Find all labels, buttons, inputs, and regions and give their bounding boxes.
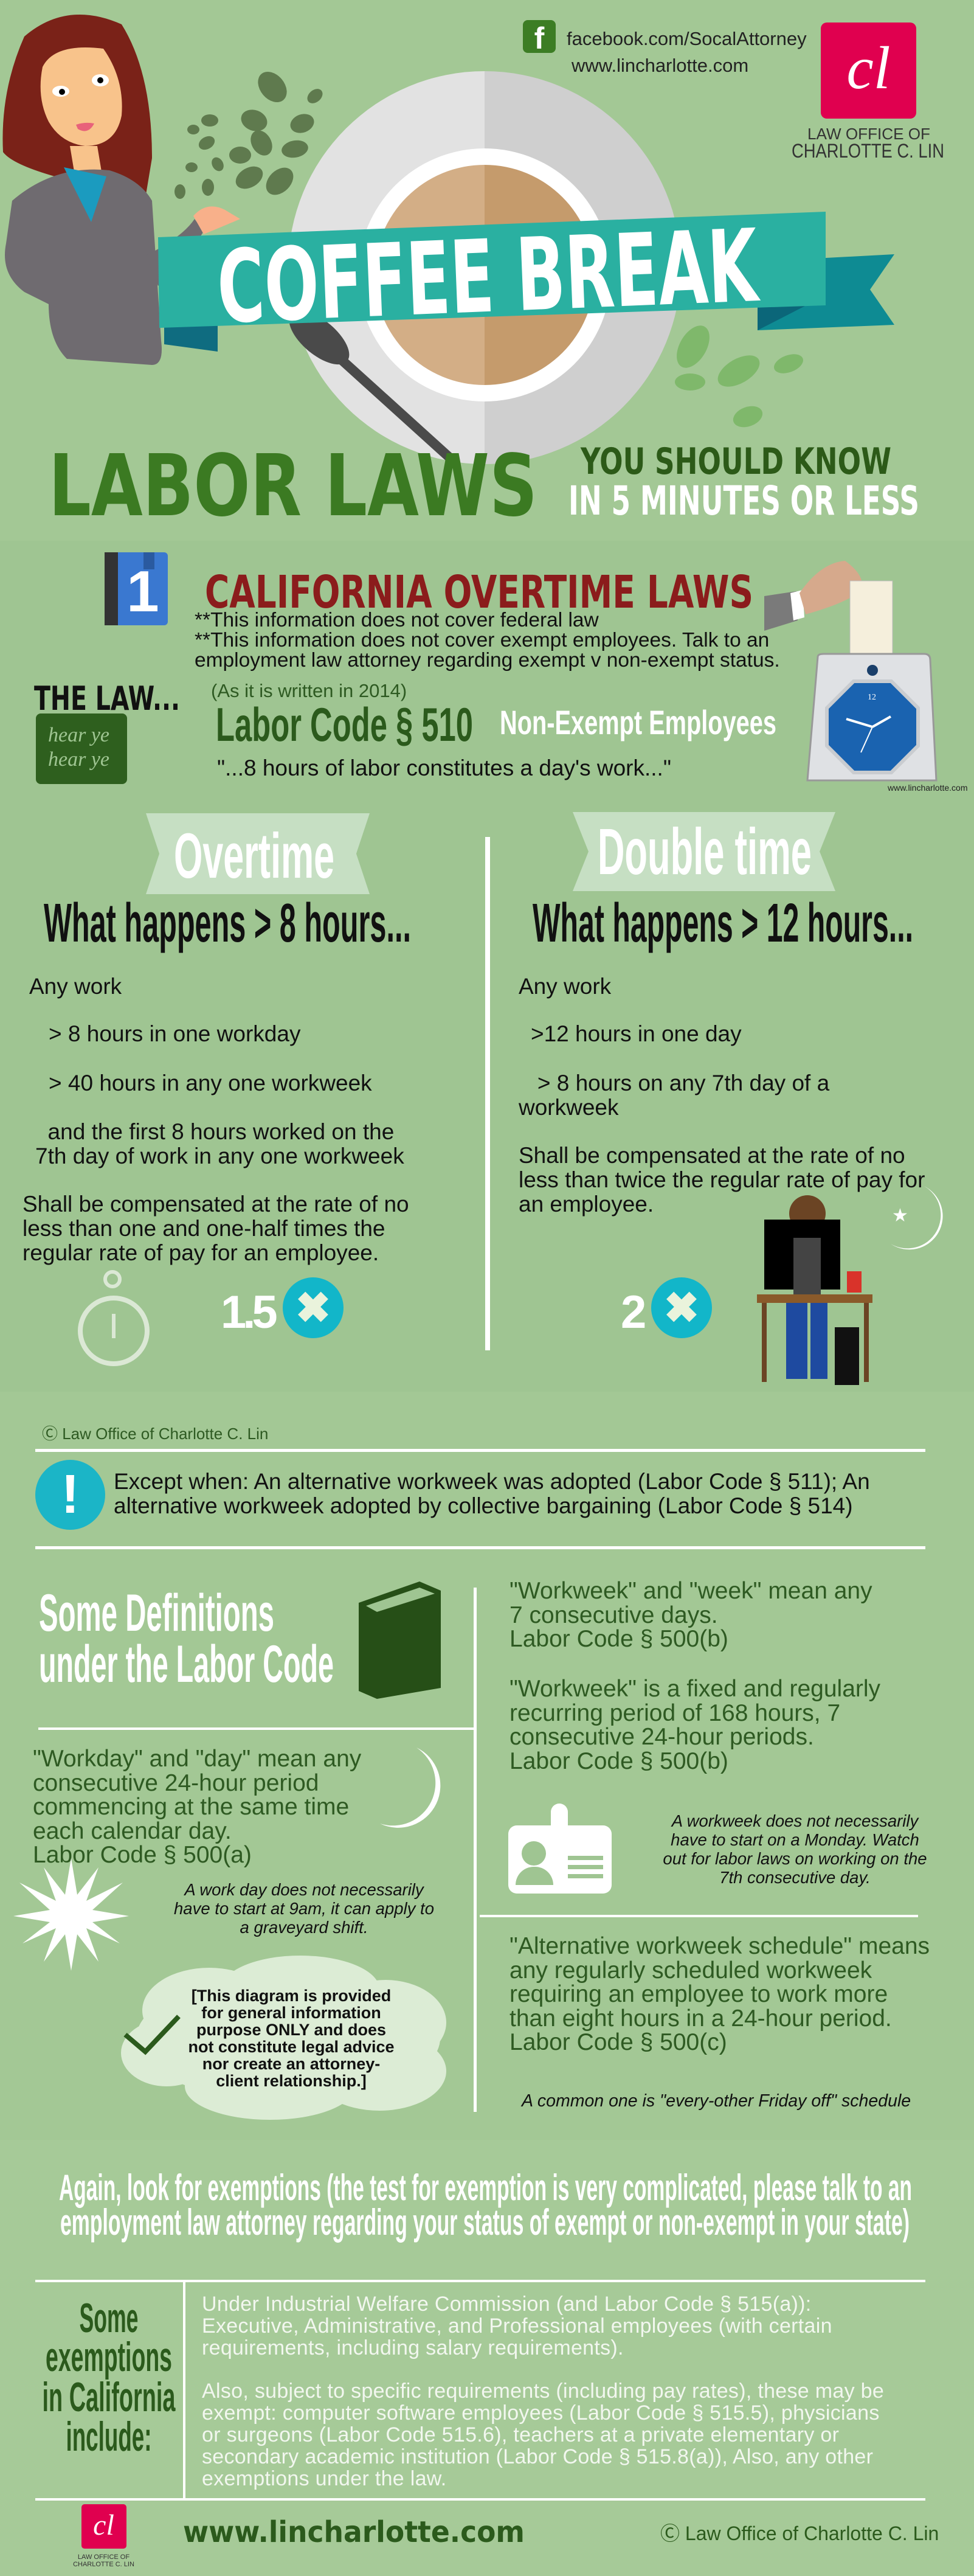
note: workweek: A workweek does not necessarily (672, 1811, 918, 1830)
note: workweek: 7th consecutive day. (719, 1868, 871, 1887)
copyright line: Ⓒ Law Office of Charlotte C. Lin (42, 1425, 268, 1443)
callout: disclaimer cloud (121, 1956, 446, 2120)
exemptions label: include: (66, 2414, 152, 2460)
logo: law office (792, 23, 944, 159)
callout: disclaimer cloud: for general information (201, 2004, 381, 2022)
text: A common one is "every-other Friday off" schedule (522, 2091, 911, 2111)
exemptions text: secondary academic institution (Labor Code § 515.8(a)), Also, any other (202, 2445, 873, 2468)
icon: hear ye scroll: hear ye (48, 748, 109, 771)
definition: workday: commencing at the same time (33, 1794, 349, 1820)
panel: double time: workweek (519, 1095, 619, 1120)
icon: time clock with hand: 12 (868, 693, 876, 702)
callout: disclaimer cloud: client relationship.] (216, 2072, 367, 2090)
double time ribbon (573, 812, 835, 891)
panel: overtime: > 8 hours in one workday (49, 1021, 300, 1046)
spoon (280, 301, 455, 462)
icon: id badge (508, 1804, 612, 1894)
heading: some definitions: under the Labor Code (39, 1635, 334, 1693)
icon: exclamation: ! (61, 1464, 79, 1525)
disclaimer text (195, 609, 780, 672)
note: workday (174, 1880, 434, 1937)
footer logo: CHARLOTTE C. LIN (73, 2561, 134, 2568)
icon: stopwatch (78, 1270, 150, 1366)
definition: alternative workweek: any regularly scheduled workweek (509, 1957, 872, 1983)
exemptions text: Under Industrial Welfare Commission (and Labor Code § 515(a)): (202, 2293, 812, 2316)
exemptions text (202, 2293, 884, 2490)
panel: overtime: and the first 8 hours worked on the (48, 1119, 394, 1144)
heading: what happens 8: What happens > 8 hours... (44, 893, 411, 954)
icon: time clock with hand (764, 561, 938, 781)
1.5x badge: ✖ (295, 1284, 331, 1331)
2x badge: ✖ (664, 1284, 699, 1331)
panel: double time (519, 812, 943, 1385)
cup (358, 148, 611, 401)
icon: sun starburst (13, 1858, 129, 1971)
icon: hear ye scroll: hear ye (48, 724, 109, 746)
saucer (288, 71, 681, 464)
note: workweek: have to start on a Monday. Watch (671, 1830, 919, 1849)
heading: overtime: Overtime (174, 821, 334, 892)
heading: california overtime laws: CALIFORNIA OVERTIME LAWS (205, 566, 753, 619)
exemptions label: exemptions (46, 2334, 172, 2380)
note: workday: a graveyard shift. (240, 1918, 368, 1937)
definition: workday (33, 1746, 361, 1868)
icon: facebook: f (534, 21, 544, 55)
panel: overtime: regular rate of pay for an employee. (22, 1240, 379, 1265)
icon: exclamation (35, 1460, 105, 1530)
title: LABOR LAWS: LABOR LAWS (49, 437, 537, 536)
social links: facebook.com/SocalAttorney (567, 28, 807, 49)
panel: double time: Any work (519, 974, 611, 999)
definition: alternative workweek: "Alternative workweek schedule" means (509, 1933, 930, 1959)
icon: moon (381, 1748, 440, 1828)
credit small: www.lincharlotte.com (888, 783, 968, 793)
note: workday: A work day does not necessarily (184, 1880, 424, 1899)
callout: except when: alternative workweek adopted by collective bargaining (Labor Code § 514) (114, 1493, 853, 1518)
icon: number 1 bookmark (105, 552, 168, 625)
social links (523, 20, 807, 76)
label: the law: THE LAW... (34, 679, 180, 718)
definition: workday: Labor Code § 500(a) (33, 1842, 252, 1868)
2x badge: 2 (621, 1286, 646, 1338)
exemptions text: Executive, Administrative, and Professional employees (with certain (202, 2314, 832, 2338)
definition: alternative workweek: than eight hours in a 24-hour period. (509, 2005, 892, 2032)
exemptions text: exemptions under the law. (202, 2467, 447, 2490)
logo: law office: LAW OFFICE OF (807, 125, 930, 143)
1.5x badge: 1.5 (221, 1286, 274, 1338)
note: workweek (663, 1811, 927, 1887)
icon: facebook (523, 20, 556, 53)
exemptions text: or surgeons (Labor Code 515.6), teachers at a private elementary or (202, 2423, 839, 2446)
social links: www.lincharlotte.com (572, 55, 748, 76)
exemptions text: Also, subject to specific requirements (including pay rates), these may be (202, 2380, 884, 2403)
footer url: www.lincharlotte.com (183, 2515, 525, 2549)
logo: law office: cl (846, 34, 891, 102)
quote: "...8 hours of labor constitutes a day's work..." (217, 755, 671, 780)
definition: workday: each calendar day. (33, 1817, 232, 1844)
exemptions label: in California (43, 2374, 176, 2420)
exemptions label: Some (79, 2295, 139, 2341)
icon: number 1 bookmark: 1 (126, 559, 159, 624)
heading: double time: Double time (598, 814, 812, 888)
icon: worker at desk with moon: ★ (892, 1206, 908, 1226)
subtitle (568, 440, 919, 524)
definition: alternative workweek (509, 1933, 930, 2055)
callout: disclaimer cloud: [This diagram is provided (192, 1987, 391, 2005)
woman (2, 15, 240, 365)
definition: workweek: Labor Code § 500(b) (509, 1626, 728, 1652)
text: consecutive 24-hour periods. (509, 1724, 814, 1750)
definition: alternative workweek: Labor Code § 500(c) (509, 2029, 727, 2055)
definition: workday: consecutive 24-hour period (33, 1770, 319, 1796)
exemptions text: requirements, including salary requirements). (202, 2336, 624, 2359)
definition: alternative workweek: requiring an employee to work more (509, 1981, 888, 2007)
panel: double time: >12 hours in one day (531, 1021, 742, 1046)
panel: double time: less than twice the regular rate of pay for (519, 1167, 925, 1192)
footer logo: cl (93, 2509, 114, 2541)
exemptions text: exempt: computer software employees (Labor Code § 515.5), physicians (202, 2401, 880, 2425)
definition: workweek: 7 consecutive days. (509, 1602, 718, 1628)
heading: some definitions: Some Definitions (39, 1584, 274, 1642)
panel: double time: Shall be compensated at the rate of no (519, 1143, 905, 1168)
note: workday: have to start at 9am, it can apply to (174, 1899, 434, 1918)
as written note: (As it is written in 2014) (211, 680, 407, 701)
header illustration: coffee cup and banner (2, 15, 894, 464)
note: workweek: out for labor laws on working on the (663, 1849, 927, 1868)
disclaimer text: employment law attorney regarding exempt v non-exempt status. (195, 649, 780, 672)
callout: except when: Except when: An alternative workweek was adopted (Labor Code § 511); An (114, 1469, 870, 1494)
text: Labor Code § 500(b) (509, 1748, 728, 1774)
panel: double time: an employee. (519, 1192, 654, 1217)
panel: overtime: Shall be compensated at the rate of no (22, 1192, 409, 1217)
text: "Workweek" is a fixed and regularly (509, 1676, 880, 1702)
footer logo (73, 2504, 134, 2568)
leaves (670, 320, 806, 431)
definition: workweek: "Workweek" and "week" mean any (509, 1578, 872, 1604)
1.5x badge (221, 1277, 344, 1338)
heading: non-exempt employees: Non-Exempt Employees (500, 703, 776, 741)
panel: overtime (22, 813, 409, 1366)
body text: Any work (29, 974, 122, 999)
callout: disclaimer cloud: not constitute legal advice (188, 2038, 395, 2056)
text: recurring period of 168 hours, 7 (509, 1699, 840, 1726)
icon: worker at desk with moon (757, 1186, 943, 1385)
definition: workweek (509, 1578, 872, 1652)
callout: except when (35, 1460, 870, 1530)
disclaimer text: **This information does not cover federal law (195, 609, 599, 631)
heading: labor code 510: Labor Code § 510 (216, 698, 473, 751)
panel: overtime: 7th day of work in any one workweek (35, 1144, 404, 1168)
panel: overtime: > 40 hours in any one workweek (49, 1071, 372, 1095)
panel: double time: > 8 hours on any 7th day of a (537, 1071, 829, 1095)
disclaimer text: **This information does not cover exempt employees. Talk to an (195, 629, 769, 651)
panel: overtime: less than one and one-half times the (22, 1216, 385, 1241)
footer logo: LAW OFFICE OF (78, 2553, 130, 2561)
heading: some definitions (39, 1584, 334, 1693)
band backgrounds (0, 541, 974, 1392)
exemptions heading (59, 2167, 912, 2243)
definition: workday: "Workday" and "day" mean any (33, 1746, 361, 1772)
footer copyright: Ⓒ Law Office of Charlotte C. Lin (660, 2522, 939, 2544)
coffee beans (174, 66, 325, 200)
divider (485, 837, 490, 1350)
overtime ribbon (146, 813, 370, 894)
banner (158, 212, 894, 352)
exemptions label (43, 2295, 176, 2460)
callout: disclaimer cloud: purpose ONLY and does (196, 2021, 386, 2039)
icon: book (359, 1581, 441, 1699)
2x badge (621, 1277, 712, 1338)
callout: disclaimer cloud: nor create an attorney- (202, 2055, 380, 2073)
icon: hear ye scroll (36, 713, 127, 784)
